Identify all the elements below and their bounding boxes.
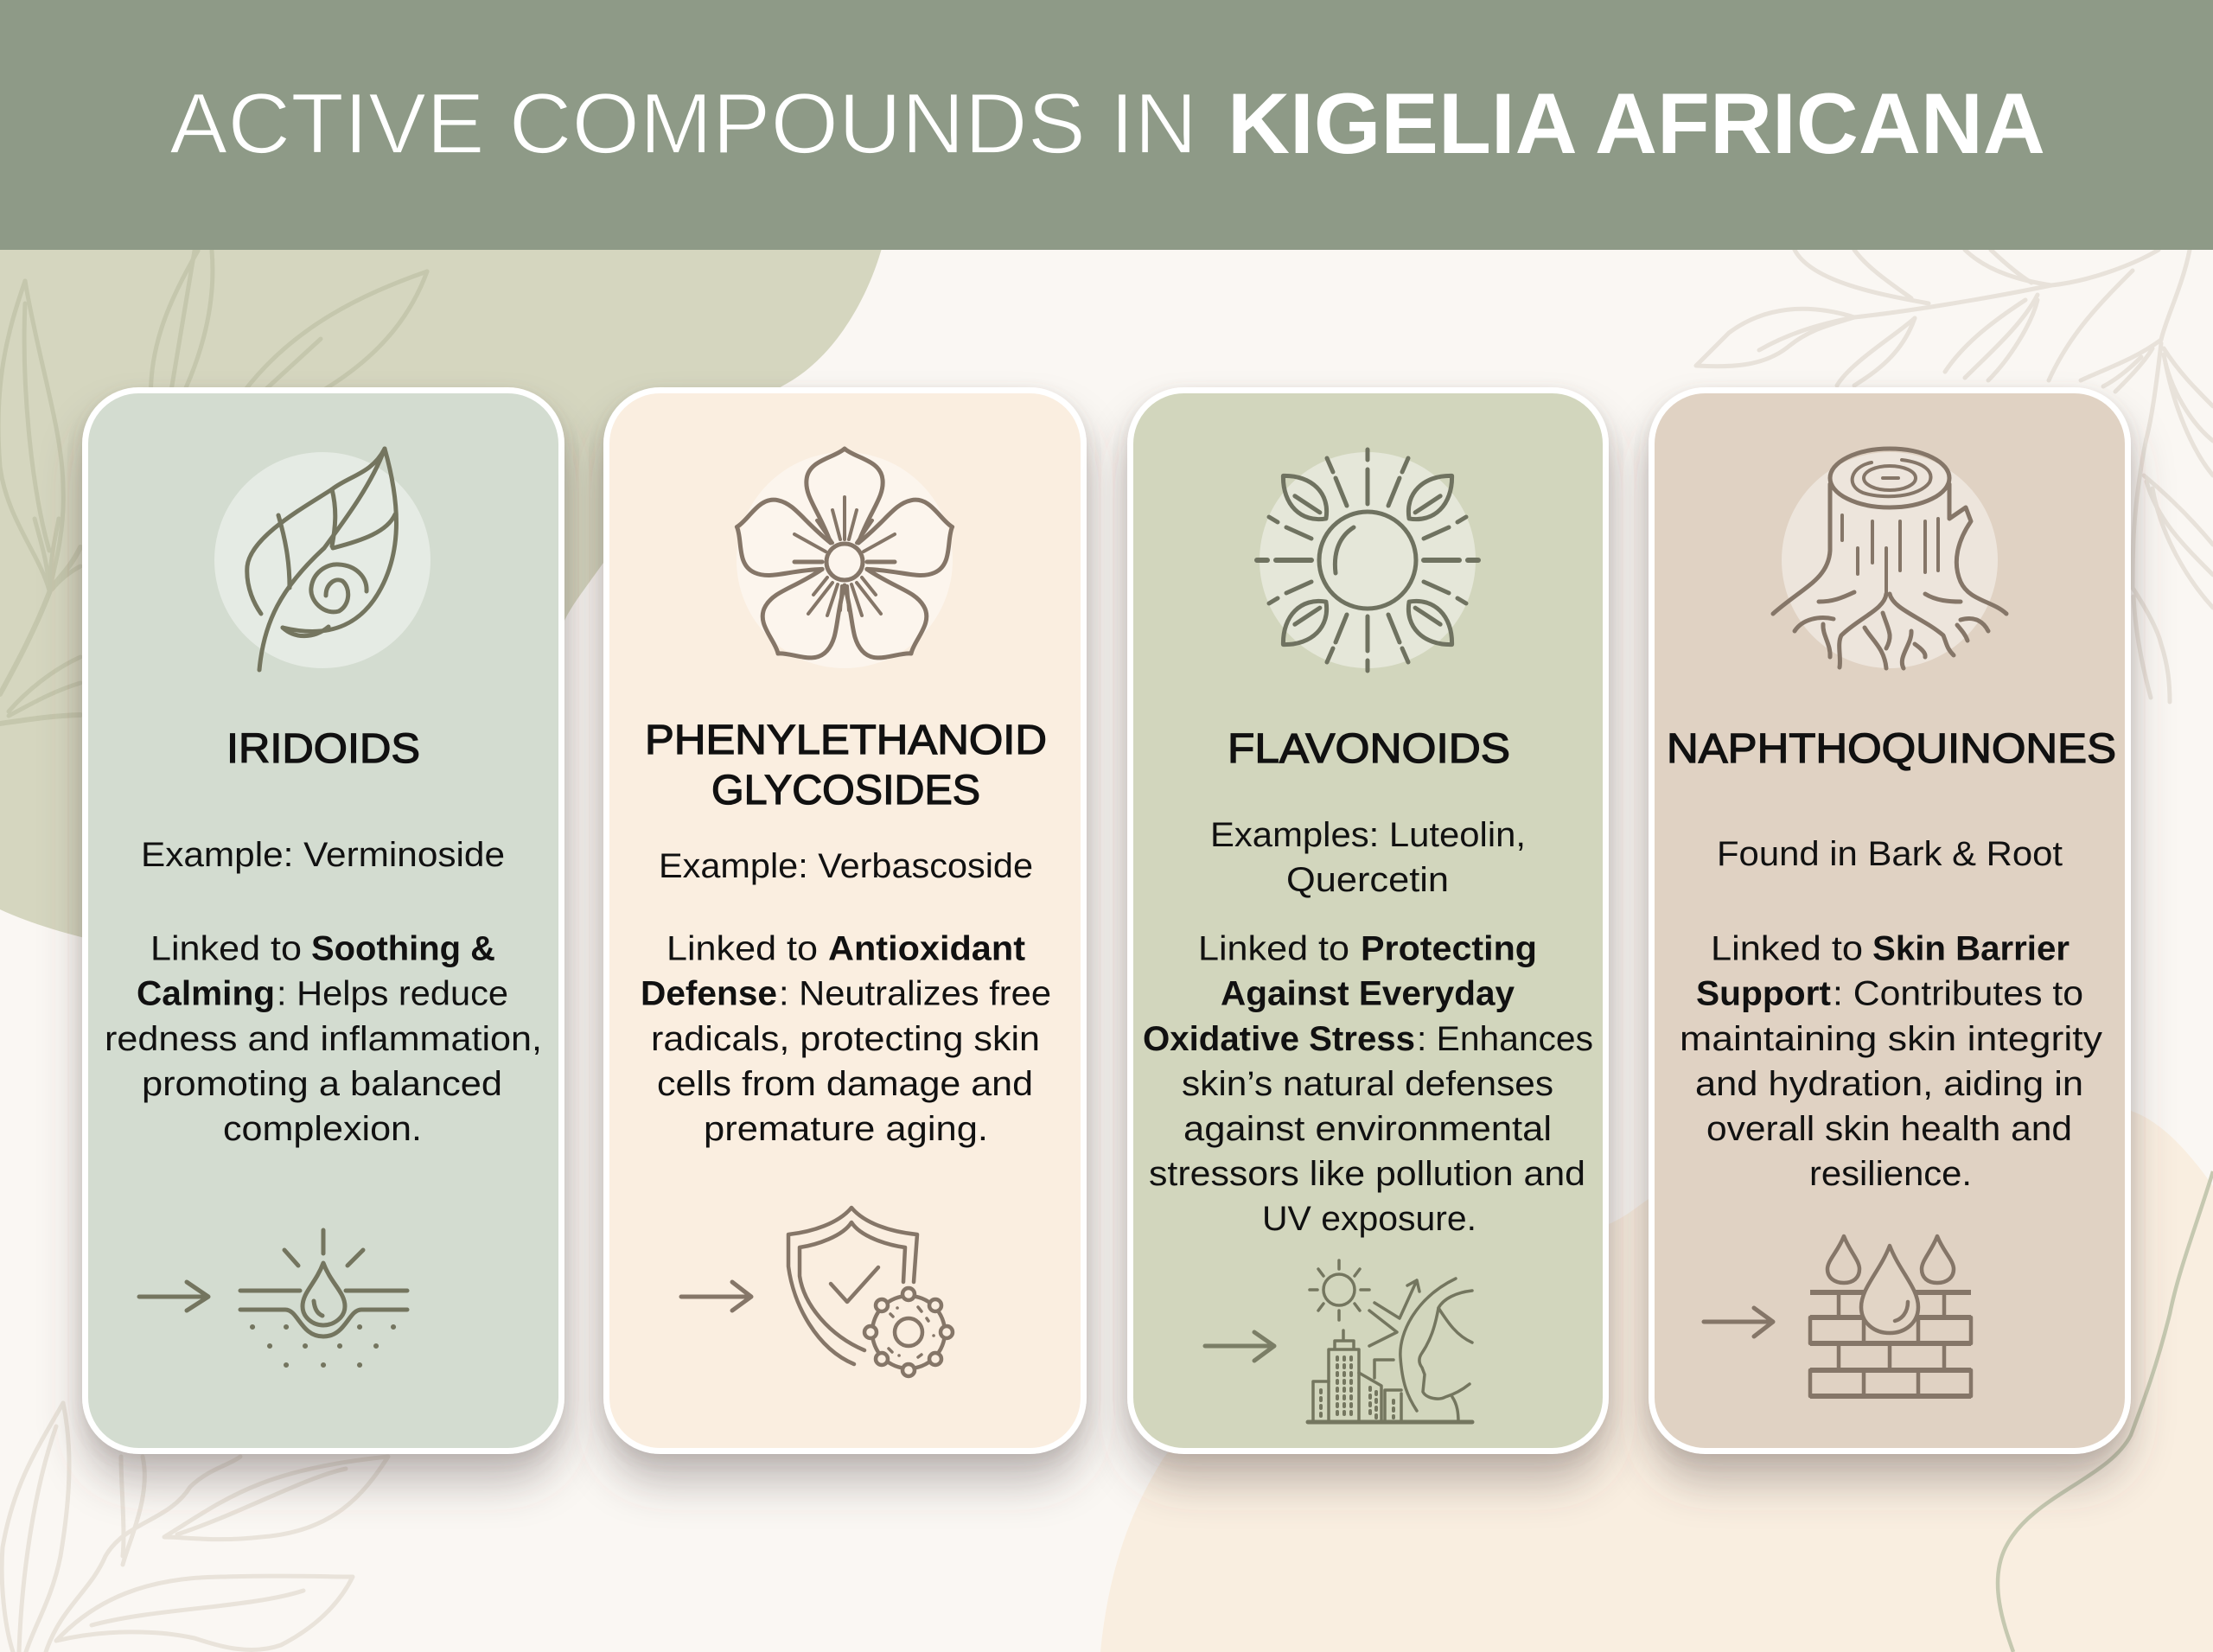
arrow — [139, 1282, 208, 1311]
description text — [641, 930, 1051, 1148]
description text: and hydration, aiding in — [1695, 1065, 2083, 1103]
description text: Calming — [137, 975, 275, 1013]
card background — [1131, 391, 1606, 1451]
heading — [645, 718, 1047, 813]
background blob: sage top-left — [0, 242, 883, 951]
description text: Linked to — [666, 930, 818, 968]
arrow — [1704, 1308, 1773, 1336]
description text: Linked to — [150, 930, 302, 968]
icon backdrop circle — [737, 452, 953, 668]
card background — [1651, 391, 2128, 1451]
description text: complexion. — [223, 1110, 422, 1148]
title — [169, 75, 2045, 171]
heading: NAPHTHOQUINONES — [1667, 726, 2116, 772]
icon: brick wall with drops — [1810, 1236, 1971, 1396]
description text — [105, 930, 542, 1148]
panel: iridoids — [85, 391, 562, 1451]
background blob: peach bottom-right — [1100, 1106, 2213, 1652]
description text: resilience. — [1809, 1155, 1972, 1193]
icon: city, sun and face — [1308, 1260, 1472, 1422]
panel: phenylethanoid glycosides — [607, 391, 1084, 1451]
description text: UV exposure. — [1262, 1200, 1476, 1238]
description text: : Enhances — [1417, 1020, 1593, 1058]
card background — [85, 391, 562, 1451]
title: KIGELIA AFRICANA — [1228, 75, 2045, 171]
description text: Soothing & — [311, 930, 495, 968]
header band — [0, 0, 2213, 250]
description text: promoting a balanced — [142, 1065, 502, 1103]
description text: maintaining skin integrity — [1680, 1020, 2102, 1058]
icon: flower — [725, 449, 964, 676]
description text: Defense — [641, 975, 777, 1013]
description text: Oxidative Stress — [1143, 1020, 1415, 1058]
description text: redness and inflammation, — [105, 1020, 542, 1058]
description text: cells from damage and — [657, 1065, 1033, 1103]
description text: Linked to — [1198, 930, 1349, 968]
description text — [1143, 930, 1593, 1238]
description text: Skin Barrier — [1872, 930, 2070, 968]
icon backdrop circle — [214, 452, 430, 668]
example line: Example: Verminoside — [141, 836, 505, 874]
description text: Protecting — [1361, 930, 1537, 968]
description text: Support — [1696, 975, 1831, 1013]
panel: naphthoquinones — [1651, 391, 2128, 1451]
description text: stressors like pollution and — [1149, 1155, 1585, 1193]
heading: FLAVONOIDS — [1228, 726, 1510, 772]
panel: flavonoids — [1131, 391, 1606, 1451]
example line: Example: Verbascoside — [659, 847, 1033, 885]
background sprig: upper right leaves — [1696, 250, 2213, 702]
arrow — [1205, 1332, 1274, 1361]
source line: Found in Bark & Root — [1717, 835, 2063, 873]
card background — [607, 391, 1084, 1451]
heading: GLYCOSIDES — [711, 768, 980, 813]
description text: premature aging. — [704, 1110, 988, 1148]
background sprig: lower left leaves — [2, 1403, 388, 1652]
description text: radicals, protecting skin — [651, 1020, 1040, 1058]
icon backdrop circle — [1782, 452, 1998, 668]
icon: sun with leaves — [1257, 450, 1478, 671]
description text: skin’s natural defenses — [1182, 1065, 1553, 1103]
description text: : Neutralizes free — [779, 975, 1051, 1013]
heading: IRIDOIDS — [226, 726, 420, 772]
description text: Against Everyday — [1221, 975, 1515, 1013]
description text: against environmental — [1183, 1110, 1552, 1148]
example lines — [1210, 816, 1526, 899]
icon: leaf with spiral — [247, 449, 396, 670]
title: ACTIVE COMPOUNDS IN — [169, 75, 1197, 171]
background sprig: upper left leaves — [0, 251, 427, 724]
description text: : Contributes to — [1833, 975, 2083, 1013]
example lines: Examples: Luteolin, — [1210, 816, 1526, 854]
description text: Antioxidant — [828, 930, 1025, 968]
icon backdrop circle — [1260, 452, 1476, 668]
background curved line — [1998, 1171, 2213, 1652]
icon: skin with drop — [240, 1230, 407, 1365]
description text: : Helps reduce — [277, 975, 508, 1013]
icon: tree stump with roots — [1773, 449, 2006, 668]
icon: shield with molecule — [788, 1208, 953, 1376]
heading: PHENYLETHANOID — [645, 718, 1047, 763]
arrow — [681, 1282, 751, 1311]
example lines: Quercetin — [1286, 861, 1449, 899]
description text: overall skin health and — [1706, 1110, 2072, 1148]
description text: Linked to — [1711, 930, 1863, 968]
description text — [1680, 930, 2102, 1193]
